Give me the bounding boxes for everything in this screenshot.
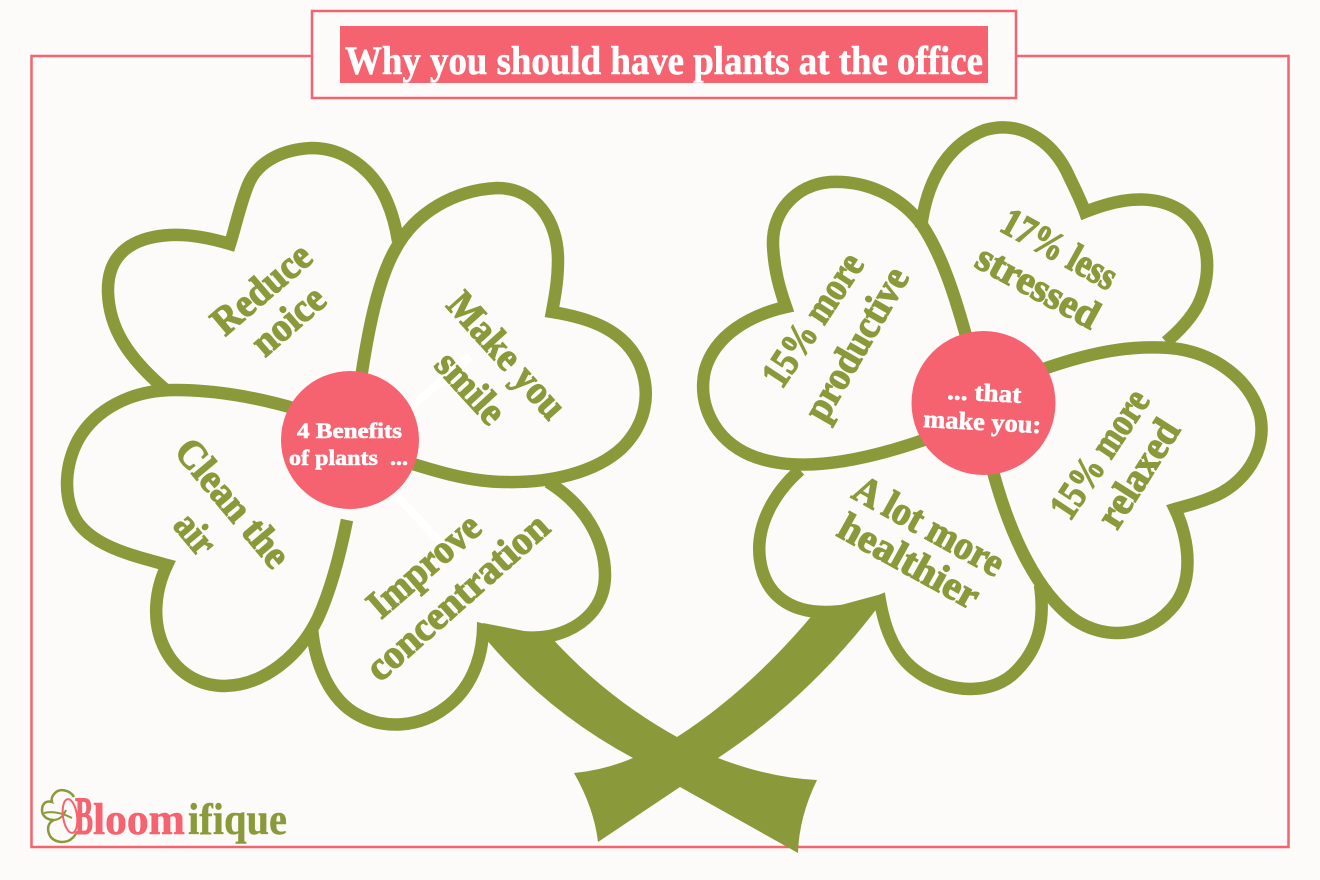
petal: reduce noice: noice (241, 276, 334, 365)
logo: Bloomifique: ifique (188, 795, 287, 844)
petal: improve concentration (312, 482, 605, 725)
petal: a lot more healthier (759, 466, 1042, 689)
petal: clean the air (67, 390, 347, 686)
petal: make you smile: smile (426, 342, 516, 433)
petal: reduce noice (108, 148, 398, 390)
petal: improve concentration: Improve (357, 504, 490, 627)
left centre circle: 4 Benefits (297, 418, 402, 443)
logo: Bloomifique: B (75, 786, 93, 846)
petal: a lot more healthier: healthier (831, 504, 988, 618)
petal: 15% more productive (703, 182, 970, 465)
left centre circle: of plants ... (289, 445, 408, 470)
petal: 15% more productive: productive (794, 259, 918, 428)
petal: 15% more productive: 15% more (752, 244, 873, 395)
petal: make you smile (360, 188, 646, 482)
title block (312, 11, 1016, 98)
logo: Bloomifique (42, 786, 287, 846)
petal: make you smile: Make you (438, 282, 576, 428)
title block: Why you should have plants at the office (345, 38, 983, 83)
right flower (703, 127, 1262, 689)
petal: 15% more relaxed (990, 347, 1262, 633)
petal: clean the air: air (165, 503, 227, 564)
petal: 17% less stressed (921, 127, 1207, 342)
petal: a lot more healthier: A lot more (846, 466, 1013, 585)
stem: crossed ribbon joining both flowers (483, 595, 878, 853)
right centre circle: make you: (923, 406, 1042, 439)
petal: 15% more relaxed: 15% more (1040, 380, 1158, 527)
faint white lines behind left flower (398, 357, 470, 560)
logo flower icon (42, 790, 79, 842)
petal: 17% less stressed: 17% less (994, 199, 1126, 299)
petal: reduce noice: Reduce (202, 233, 321, 344)
logo: Bloomifique: loom (93, 795, 185, 844)
right centre circle (912, 331, 1056, 475)
petal: 17% less stressed: stressed (969, 234, 1108, 338)
left centre circle (281, 371, 419, 509)
left flower (67, 148, 646, 725)
petal: 15% more relaxed: relaxed (1087, 410, 1189, 536)
petal: improve concentration: concentration (356, 503, 558, 690)
right centre circle: ... that (947, 378, 1023, 409)
petal: clean the air: Clean the (166, 429, 300, 577)
